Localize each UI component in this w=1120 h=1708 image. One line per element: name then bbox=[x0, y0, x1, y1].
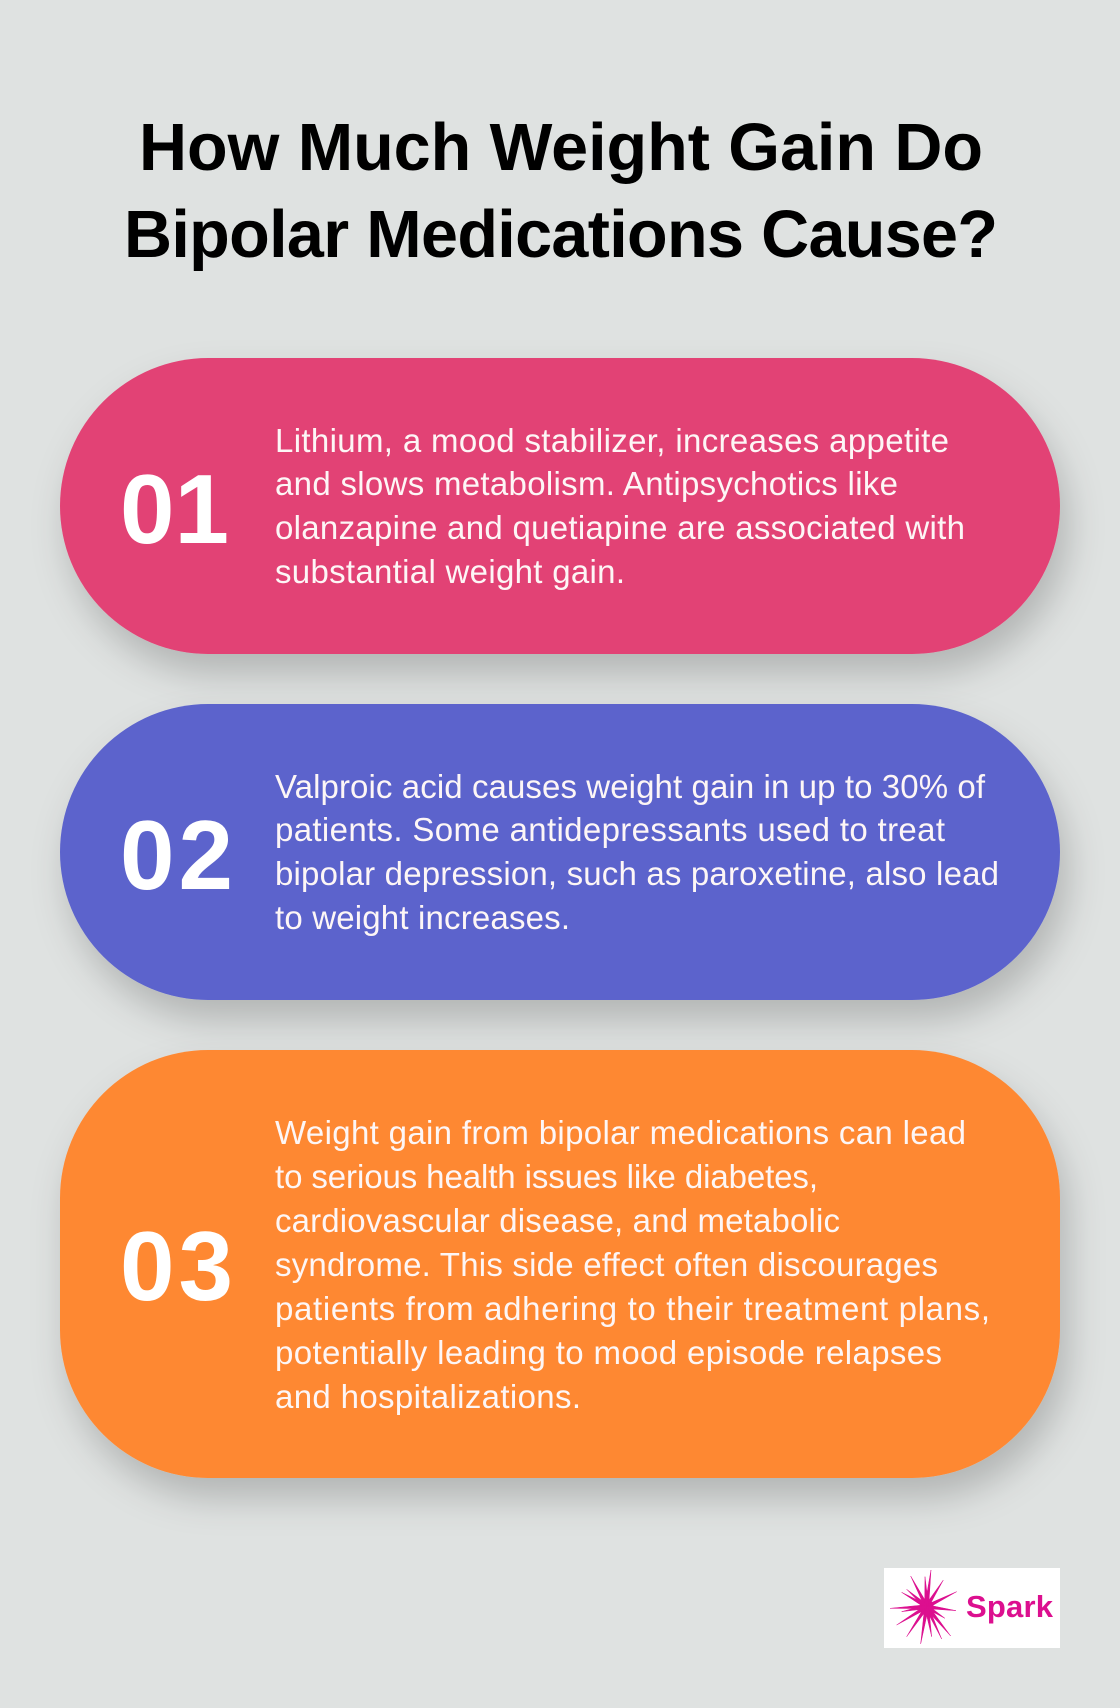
text: step 03: cardiovascular disease, and metabolic bbox=[275, 1202, 840, 1239]
text: step 03: potentially leading to mood episode relapses bbox=[275, 1334, 942, 1371]
text: step 01: and slows metabolism. Antipsychotics like bbox=[275, 465, 898, 502]
text: step 02: Valproic acid causes weight gain in up to 30% of bbox=[275, 768, 986, 805]
text: step 01: Lithium, a mood stabilizer, increases appetite bbox=[275, 422, 949, 459]
text: step 01 bbox=[275, 422, 965, 590]
text: step 03 bbox=[275, 1114, 990, 1415]
logo wordmark: Spark bbox=[966, 1589, 1054, 1624]
text: step 01: olanzapine and quetiapine are associated with bbox=[275, 509, 965, 546]
text: step 03: and hospitalizations. bbox=[275, 1378, 581, 1415]
logo: Spark bbox=[884, 1568, 1060, 1648]
panel: step 02 bbox=[60, 704, 1060, 1000]
panel: step 03 bbox=[60, 1050, 1060, 1478]
panel: step 01 bbox=[60, 358, 1060, 654]
text: step 02: to weight increases. bbox=[275, 899, 570, 936]
text: step 01: substantial weight gain. bbox=[275, 553, 625, 590]
number 02: 02 bbox=[120, 800, 233, 910]
title: Bipolar Medications Cause? bbox=[124, 198, 998, 272]
text: step 03: syndrome. This side effect often discourages bbox=[275, 1246, 938, 1283]
text: step 03: patients from adhering to their treatment plans, bbox=[275, 1290, 990, 1327]
text: step 02: bipolar depression, such as paroxetine, also lead bbox=[275, 855, 999, 892]
number 01: 01 bbox=[120, 454, 229, 564]
icon: spark burst bbox=[890, 1570, 957, 1644]
number 03: 03 bbox=[120, 1211, 233, 1321]
title bbox=[124, 111, 998, 272]
text: step 03: Weight gain from bipolar medications can lead bbox=[275, 1114, 966, 1151]
text: step 03: to serious health issues like diabetes, bbox=[275, 1158, 818, 1195]
text: step 02: patients. Some antidepressants used to treat bbox=[275, 811, 945, 848]
title: How Much Weight Gain Do bbox=[139, 111, 983, 185]
text: step 02 bbox=[275, 768, 999, 936]
